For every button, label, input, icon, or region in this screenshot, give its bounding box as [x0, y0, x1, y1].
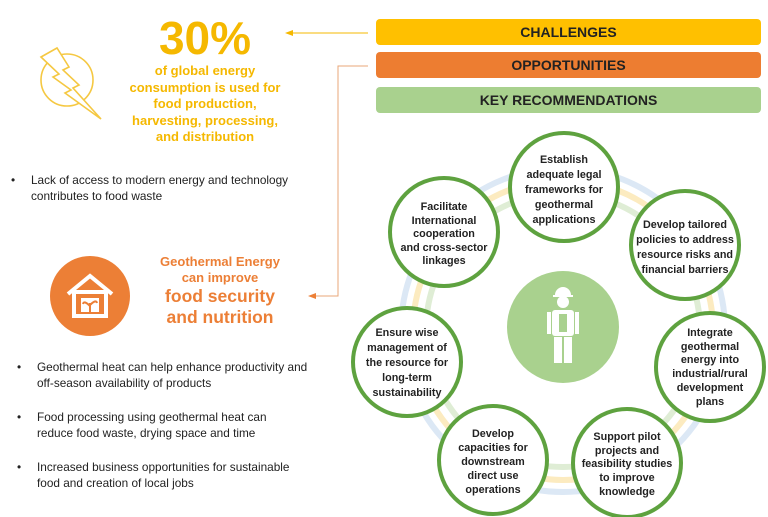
stat description: consumption is used for — [130, 80, 280, 94]
circle: legal frameworks — [510, 133, 618, 241]
stat description: and distribution — [156, 129, 254, 144]
circle: international cooperation — [390, 178, 498, 286]
circle: international cooperation: Facilitate — [421, 201, 467, 213]
title: 30% stat: 30% — [159, 12, 251, 64]
circle: tailored policies: Develop tailored — [643, 219, 727, 231]
text: • — [17, 410, 21, 424]
bar: challenges: CHALLENGES — [520, 24, 617, 40]
circle: pilot projects: to improve — [599, 472, 655, 484]
text: Food processing using geothermal heat can — [37, 410, 267, 424]
circle: international cooperation: linkages — [422, 255, 466, 267]
text: • — [17, 360, 21, 374]
circle: integrate: Integrate — [687, 327, 733, 339]
circle: tailored policies — [631, 191, 739, 299]
opportunity headline: Geothermal Energy — [160, 254, 280, 269]
bar: key recommendations — [376, 87, 761, 113]
stat description: harvesting, processing, — [132, 112, 278, 128]
circle: capacities: direct use — [467, 470, 519, 482]
bar: challenges — [376, 19, 761, 45]
circle: legal frameworks: adequate legal — [526, 169, 602, 181]
circle: pilot projects: projects and — [595, 445, 659, 457]
circle: tailored policies: financial barriers — [641, 264, 729, 276]
opportunity headline: can improve — [182, 270, 258, 285]
stat description — [130, 63, 280, 144]
circle: capacities — [439, 406, 547, 514]
text: • — [17, 460, 21, 474]
circle: integrate: development — [677, 382, 744, 394]
opportunity headline — [160, 254, 280, 327]
challenge bullet: Lack of access to modern energy and technology contributes to food waste — [31, 173, 288, 203]
circle: tailored policies: policies to address — [636, 234, 734, 246]
opportunity headline: food security — [165, 286, 275, 306]
circle: tailored policies: resource risks and — [637, 249, 733, 261]
circle: wise management: Ensure wise — [375, 327, 439, 339]
circle: pilot projects: knowledge — [599, 486, 655, 498]
circle: wise management: sustainability — [372, 387, 442, 399]
text: Increased business opportunities for sustainable food and creation of local jobs — [37, 460, 289, 490]
circle: capacities: downstream — [461, 456, 525, 468]
circle: capacities: Develop — [472, 428, 514, 440]
stat description: food production, — [153, 96, 257, 111]
opportunity bullets: Geothermal heat can help enhance productivity and off-season availability of products — [37, 360, 307, 390]
circle: international cooperation: International — [412, 215, 476, 227]
circle: integrate: industrial/rural — [672, 368, 748, 380]
circle: pilot projects: feasibility studies — [582, 458, 672, 470]
circle: international cooperation: cooperation — [413, 228, 475, 240]
circle: legal frameworks: Establish — [540, 154, 588, 166]
text: reduce food waste, drying space and time — [37, 426, 255, 440]
circle: international cooperation: and cross-sector — [400, 242, 488, 254]
circle: legal frameworks: frameworks for — [525, 184, 604, 196]
circle: integrate: geothermal — [681, 341, 739, 353]
circle: wise management: management of — [367, 342, 447, 354]
bar: key recommendations: KEY RECOMMENDATIONS — [480, 92, 657, 108]
circle: pilot projects: Support pilot — [593, 431, 661, 443]
circle: integrate — [656, 313, 764, 421]
circle: capacities: capacities for — [458, 442, 529, 454]
icon: lightning — [40, 46, 102, 120]
circle: legal frameworks: applications — [532, 214, 596, 226]
stat description: of global energy — [155, 63, 255, 78]
text: • — [11, 173, 15, 187]
bar: opportunities: OPPORTUNITIES — [511, 57, 626, 73]
opportunity headline: and nutrition — [167, 307, 273, 327]
circle: integrate: energy into — [681, 354, 739, 366]
circle: legal frameworks: geothermal — [535, 199, 593, 211]
circle: capacities: operations — [465, 484, 521, 496]
icon: greenhouse — [50, 256, 130, 336]
bar: opportunities — [376, 52, 761, 78]
circle: pilot projects — [573, 409, 681, 517]
circle: integrate: plans — [696, 396, 724, 408]
circle: wise management: the resource for — [366, 357, 449, 369]
circle: wise management — [353, 308, 461, 416]
circle: wise management: long-term — [382, 372, 432, 384]
center icon: worker — [507, 271, 619, 383]
